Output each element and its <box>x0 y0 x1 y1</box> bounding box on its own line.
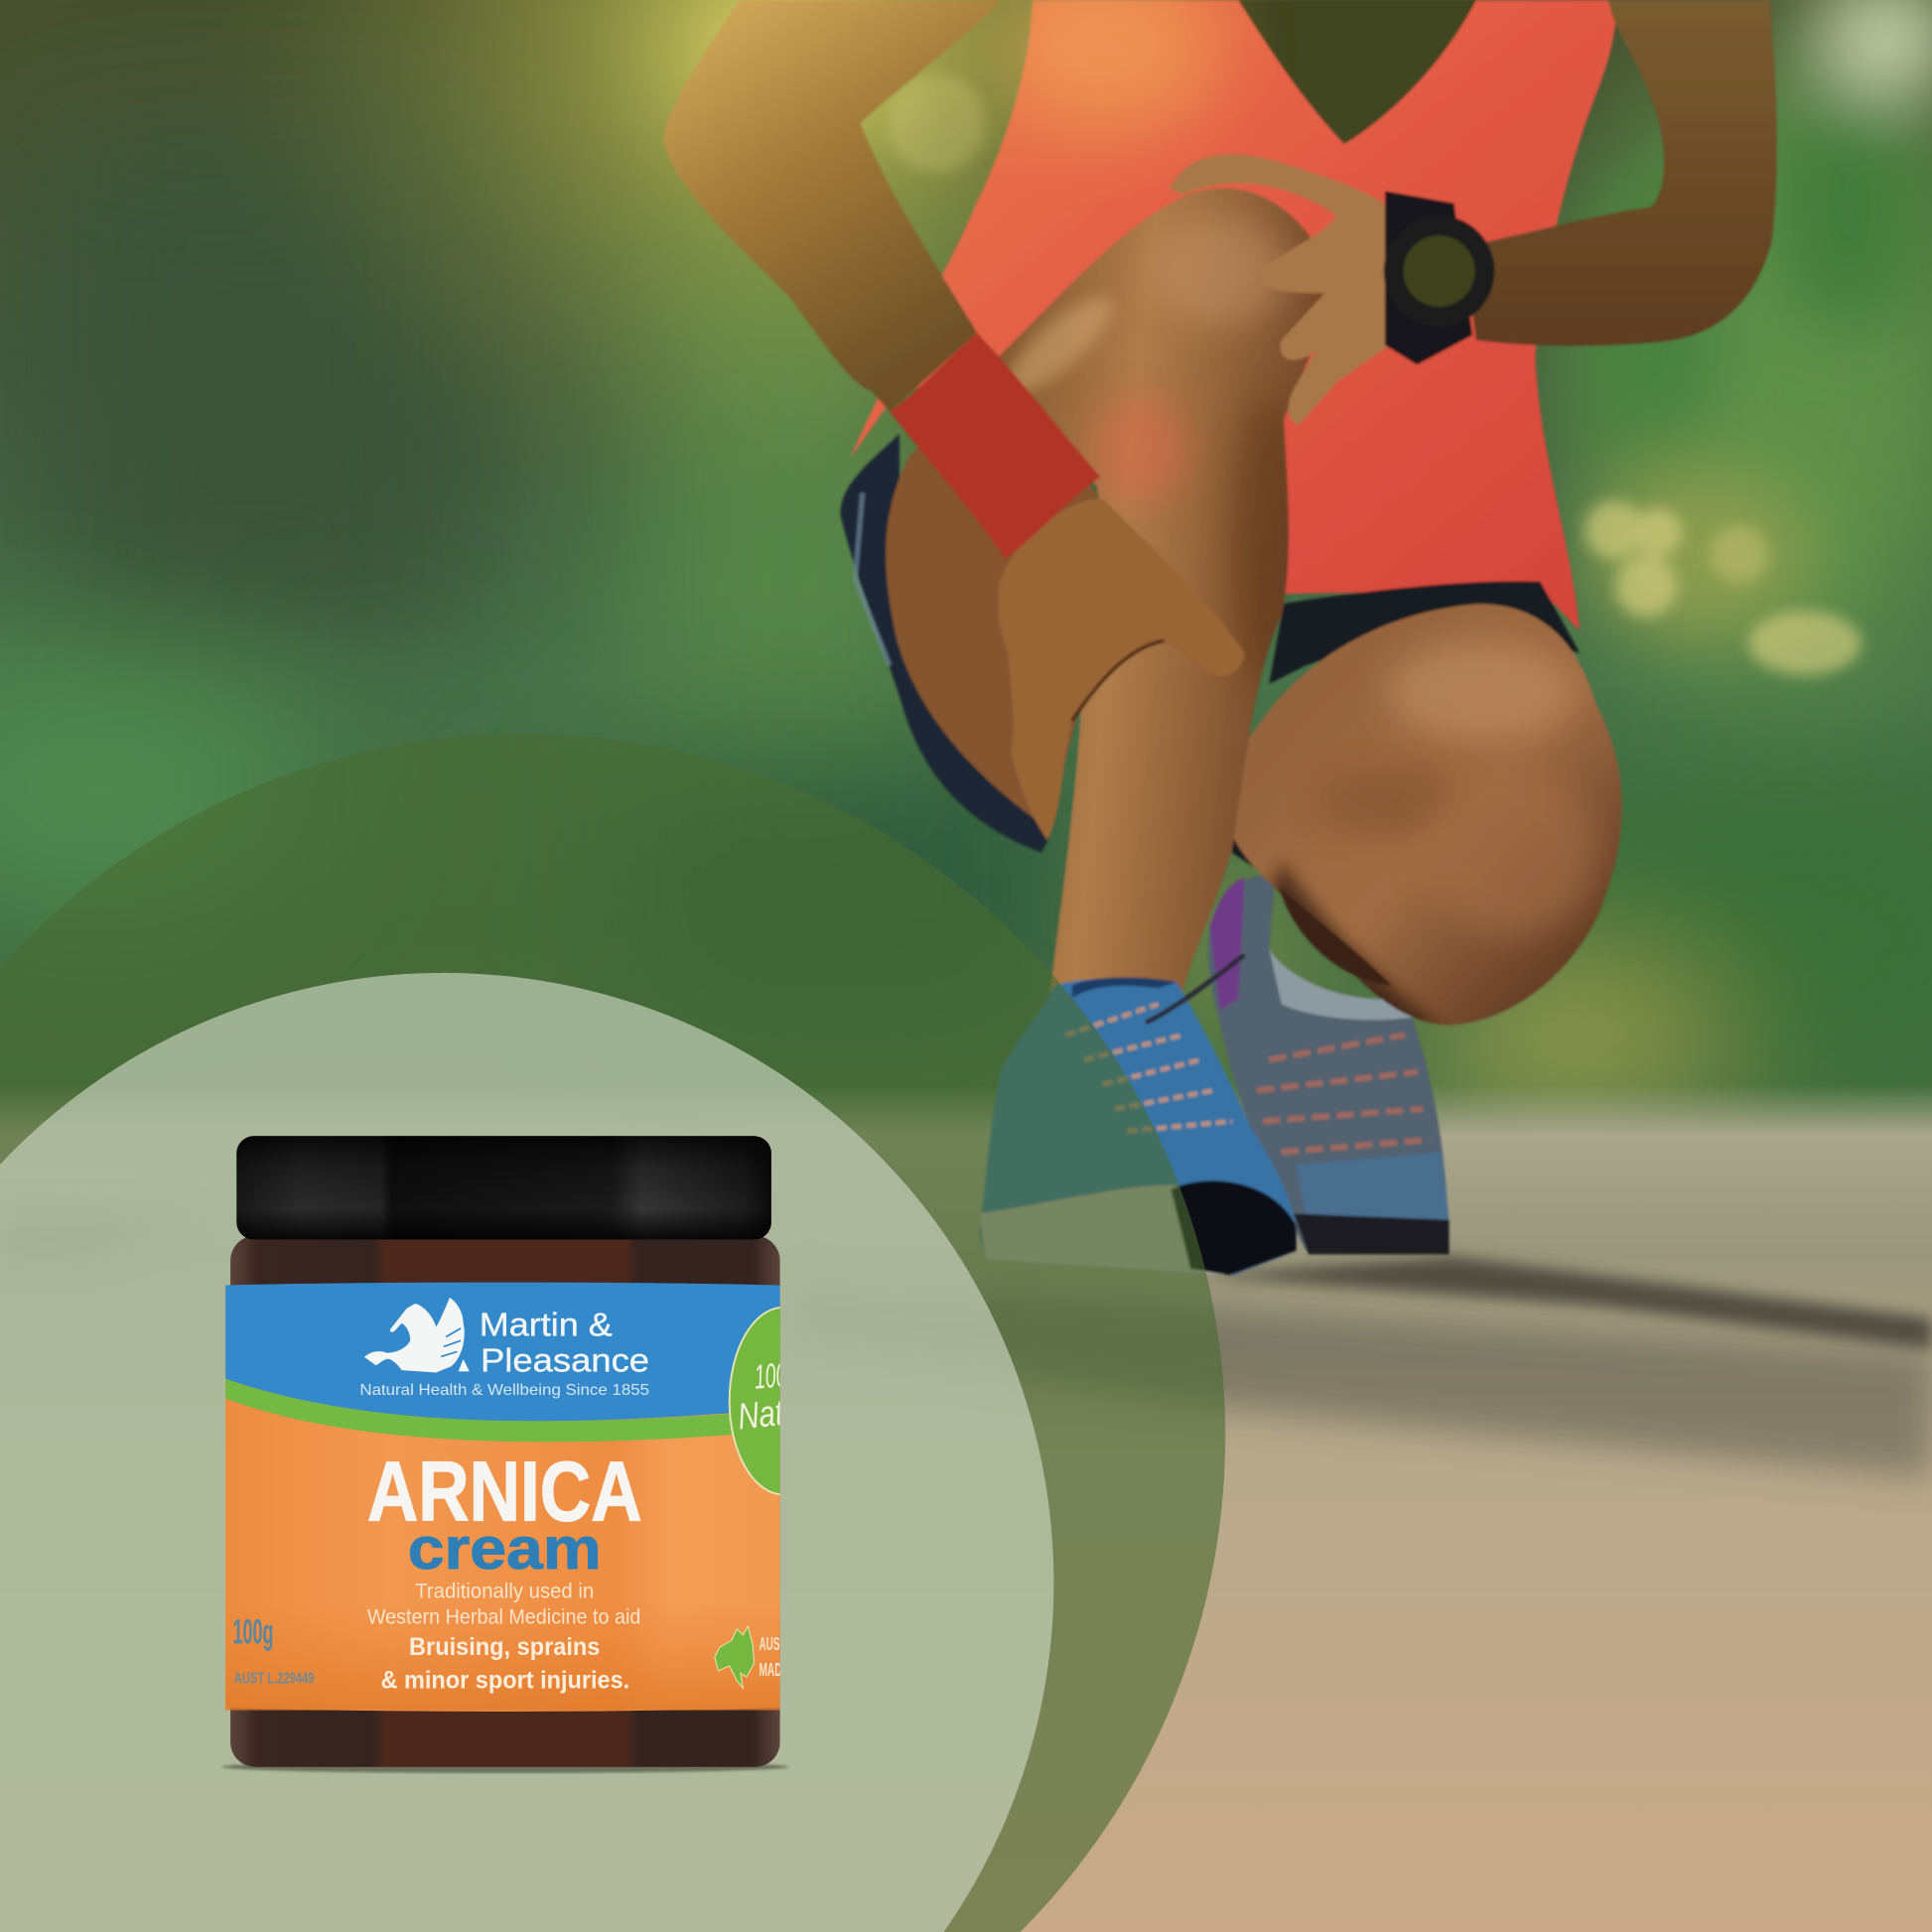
back shoe <box>1208 873 1449 1254</box>
glass jar body <box>230 1236 780 1767</box>
runner clutching her leg <box>663 0 1777 1276</box>
orange label band <box>225 1368 780 1712</box>
product label: MADE <box>759 1659 788 1680</box>
100% natural badge <box>729 1307 780 1495</box>
Australia map icon <box>715 1626 755 1688</box>
upper hand on knee <box>1170 154 1399 425</box>
100% natural badge: Natural <box>736 1386 835 1438</box>
green swoosh <box>225 1379 740 1442</box>
AUST L code: AUST L.229449 <box>234 1669 314 1687</box>
big right thigh <box>1226 604 1622 1035</box>
product jar: Arnica cream <box>221 1136 838 1773</box>
net weight: 100g <box>233 1614 274 1652</box>
brand name: Martin & <box>480 1307 613 1343</box>
jar shadow <box>221 1760 788 1773</box>
raised knee and shin <box>995 188 1337 992</box>
wrist band <box>890 333 1100 559</box>
usage text: Traditionally used in <box>415 1579 594 1603</box>
product label: & minor sport injuries. <box>380 1667 629 1694</box>
decorative light sage circle <box>0 973 1053 1932</box>
photo background: road <box>0 1084 1932 1932</box>
100% natural badge: 100% <box>754 1355 805 1397</box>
sports watch <box>1384 191 1494 364</box>
product name: ARNICA <box>367 1444 642 1539</box>
blue label band <box>225 1283 780 1421</box>
product type: cream <box>408 1515 602 1582</box>
product label <box>225 1283 838 1712</box>
neckline and chest <box>1238 0 1476 144</box>
right arm <box>1463 0 1777 345</box>
left thigh <box>886 369 1097 828</box>
Australian made text: AUSTRALIAN <box>759 1633 823 1654</box>
indications: Bruising, sprains <box>409 1634 600 1661</box>
photo background: blurred trees <box>0 0 1932 1232</box>
decorative dark green circle <box>0 734 1225 1932</box>
brand tagline: Natural Health & Wellbeing Since 1855 <box>359 1382 649 1399</box>
Pegasus logo <box>364 1298 470 1373</box>
shirt yellow sun glow <box>998 0 1220 136</box>
left arm <box>663 0 1002 412</box>
jar lid <box>236 1136 771 1240</box>
shirt <box>850 0 1616 630</box>
front shoe <box>980 955 1297 1276</box>
back shorts <box>840 434 1049 853</box>
lower hand on calf <box>998 498 1244 840</box>
product label: Pleasance <box>481 1342 649 1379</box>
right shorts <box>1269 581 1580 684</box>
product label: Western Herbal Medicine to aid <box>367 1604 640 1629</box>
